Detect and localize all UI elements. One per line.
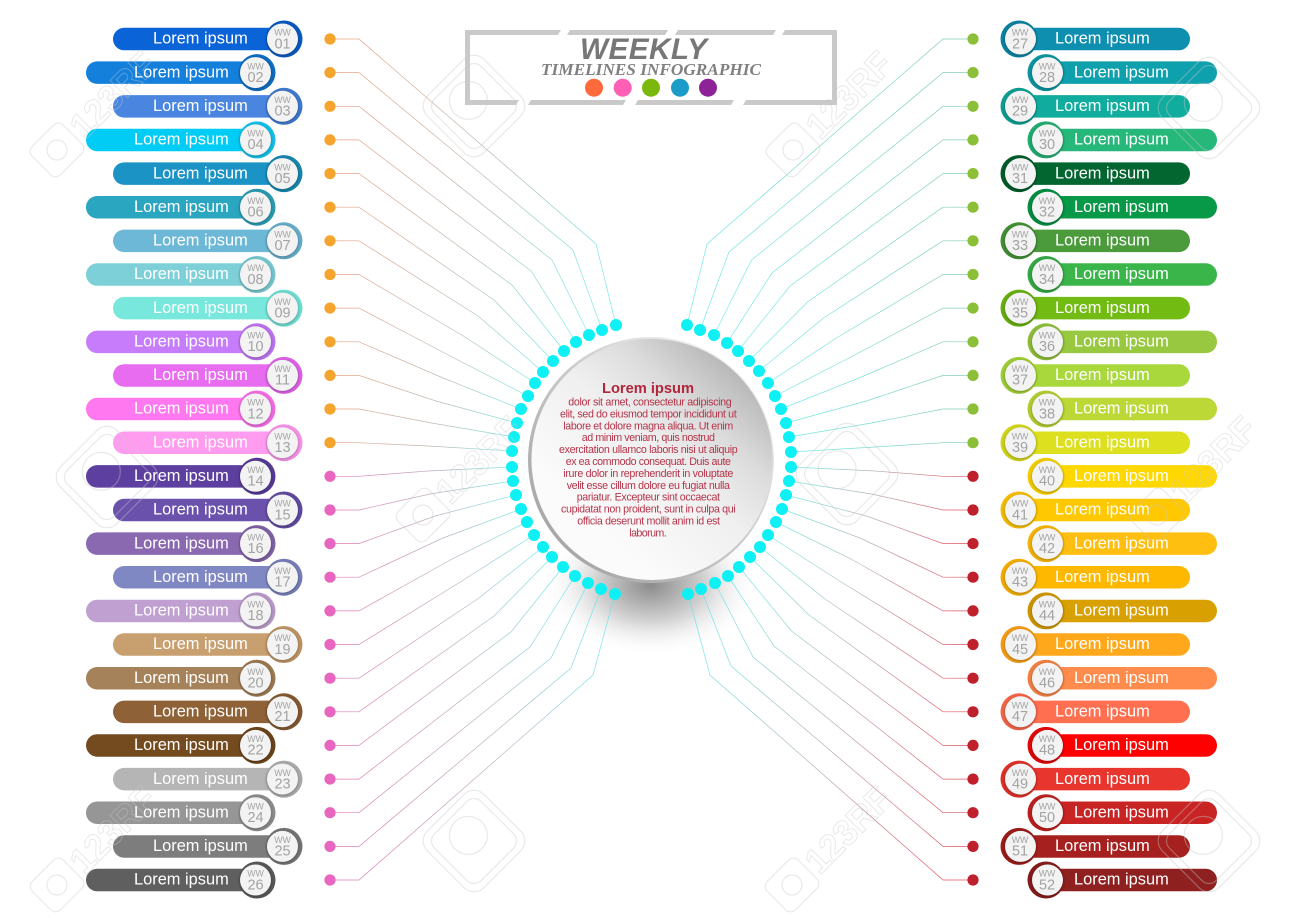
pill: week 15 — [113, 492, 302, 528]
pill: week 36 — [1028, 323, 1217, 360]
pill: week 31: 31 — [1012, 171, 1028, 187]
pill: week 08 — [86, 256, 276, 293]
pill: week 18: WW — [247, 600, 264, 610]
pill: week 17 — [113, 559, 302, 596]
pill: week 38: Lorem ipsum — [1074, 400, 1169, 418]
pill: week 49: Lorem ipsum — [1055, 770, 1150, 788]
orange node dots — [324, 33, 336, 448]
pill: week 12: WW — [247, 398, 264, 408]
pill: week 45: Lorem ipsum — [1055, 635, 1150, 653]
pill: week 05 — [113, 155, 302, 192]
pill: week 01: Lorem ipsum — [153, 30, 248, 48]
pill: week 34: Lorem ipsum — [1074, 265, 1169, 283]
pill: week 17: WW — [274, 566, 291, 576]
pill: week 37: 37 — [1012, 373, 1028, 389]
pill: week 44: 44 — [1039, 608, 1055, 624]
pill: week 49: WW — [1012, 768, 1029, 778]
center body text: elit, sed do eiusmod tempor incididunt ut — [560, 408, 737, 420]
pill: week 52: WW — [1039, 869, 1056, 879]
pill: week 18 — [86, 592, 276, 629]
connector lines: weeks 1-13 — [330, 39, 616, 451]
pill: week 28: WW — [1039, 61, 1056, 71]
red node dots — [967, 471, 979, 886]
pill: week 14: WW — [247, 465, 264, 475]
title frame — [465, 30, 837, 105]
pill: week 39 — [1000, 424, 1190, 461]
center body text: labore et dolore magna aliqua. Ut enim — [563, 420, 733, 432]
pill: week 21: Lorem ipsum — [153, 702, 248, 720]
pill: week 35: WW — [1012, 297, 1029, 307]
center body text: officia deserunt mollit anim id est — [577, 516, 720, 528]
pill: week 24: Lorem ipsum — [134, 803, 229, 821]
pill: week 48: 48 — [1039, 743, 1055, 759]
pill: week 16: Lorem ipsum — [134, 534, 229, 552]
green node dots — [967, 33, 979, 448]
pill: week 52 — [1028, 862, 1217, 898]
pill: week 50 — [1028, 794, 1217, 831]
pill: week 12: 12 — [247, 406, 264, 422]
watermark: top row — [27, 43, 1266, 180]
subtitle: timelines infographic: TIMELINES INFOGRAPHIC — [541, 60, 762, 79]
pill: week 24: 24 — [247, 810, 264, 826]
title colour dots — [585, 79, 717, 97]
pill: week 05: Lorem ipsum — [153, 164, 248, 182]
pill: week 36: 36 — [1039, 339, 1055, 355]
pill: week 27: WW — [1012, 28, 1029, 38]
pill: week 07: 07 — [274, 238, 291, 254]
pill: week 18: 18 — [247, 608, 264, 624]
pill: week 32: WW — [1039, 196, 1056, 206]
pill: week 31: WW — [1012, 162, 1029, 172]
pill: week 15: Lorem ipsum — [153, 501, 248, 519]
pill: week 38: 38 — [1039, 406, 1055, 422]
pill: week 31 — [1000, 155, 1190, 192]
connector lines: weeks 27-39 — [687, 39, 973, 452]
pill: week 42 — [1028, 525, 1217, 562]
pill: week 51: 51 — [1012, 844, 1028, 860]
pill: week 45: 45 — [1012, 642, 1028, 658]
pill: week 38: WW — [1039, 398, 1056, 408]
pill: week 47: 47 — [1012, 709, 1028, 725]
pill: week 04 — [86, 121, 276, 158]
center heading: Lorem ipsum — [602, 381, 694, 397]
pill: week 32 — [1028, 189, 1217, 226]
pill: week 29 — [1000, 88, 1190, 125]
pill: week 24 — [86, 794, 276, 831]
pill: week 44: Lorem ipsum — [1074, 602, 1169, 620]
pill: week 26 — [86, 862, 276, 898]
pill: week 29: WW — [1012, 95, 1029, 105]
pill: week 07 — [113, 222, 302, 259]
pill: week 19: 19 — [274, 642, 291, 658]
pill: week 01: 01 — [274, 36, 291, 52]
pill: week 11 — [113, 357, 302, 394]
pill: week 12: Lorem ipsum — [134, 400, 229, 418]
pill: week 51: Lorem ipsum — [1055, 837, 1150, 855]
center body text: irure dolor in reprehenderit in voluptate — [563, 468, 733, 480]
pill: week 02: WW — [247, 61, 264, 71]
pill: week 45: WW — [1012, 633, 1029, 643]
pill: week 13: WW — [274, 431, 291, 441]
pill: week 02 — [86, 54, 276, 91]
pill: week 46: WW — [1039, 667, 1056, 677]
pill: week 11: WW — [274, 364, 291, 374]
pill: week 35: Lorem ipsum — [1055, 299, 1150, 317]
pill: week 11: Lorem ipsum — [153, 366, 248, 384]
pill: week 48 — [1028, 727, 1217, 764]
pill: week 10: 10 — [247, 339, 264, 355]
pill: week 40: 40 — [1039, 474, 1055, 490]
center circle drop shadow — [541, 513, 761, 657]
pill: week 27: 27 — [1012, 36, 1028, 52]
pill: week 31: Lorem ipsum — [1055, 164, 1150, 182]
pill: week 51 — [1000, 828, 1190, 865]
pill: week 37: Lorem ipsum — [1055, 366, 1150, 384]
pill: week 07: WW — [274, 230, 291, 240]
pill: week 51: WW — [1012, 835, 1029, 845]
pill: week 14 — [86, 458, 276, 495]
pill: week 18: Lorem ipsum — [134, 602, 229, 620]
center body text: ad minim veniam, quis nostrud — [582, 432, 715, 444]
pill: week 09: Lorem ipsum — [153, 299, 248, 317]
pill: week 03: 03 — [274, 104, 291, 120]
pill: week 19: Lorem ipsum — [153, 635, 248, 653]
pill: week 14: Lorem ipsum — [134, 467, 229, 485]
pill: week 40 — [1028, 458, 1217, 495]
pill: week 01: WW — [274, 28, 291, 38]
pill: week 10: WW — [247, 330, 264, 340]
pill: week 30: Lorem ipsum — [1074, 131, 1169, 149]
pill: week 03: Lorem ipsum — [153, 97, 248, 115]
pill: week 44 — [1028, 592, 1217, 629]
pill: week 21: WW — [274, 700, 291, 710]
pill: week 24: WW — [247, 801, 264, 811]
pill: week 08: 08 — [247, 272, 264, 288]
center body text: laborum. — [629, 527, 667, 539]
pill: week 40: Lorem ipsum — [1074, 467, 1169, 485]
pill: week 07: Lorem ipsum — [153, 232, 248, 250]
center body text — [559, 396, 738, 539]
watermark: middle row: 123RF — [427, 408, 530, 511]
pill: week 19: WW — [274, 633, 291, 643]
pill: week 02: Lorem ipsum — [134, 63, 229, 81]
pink node dots — [324, 471, 336, 886]
pill: week 33: 33 — [1012, 238, 1028, 254]
center body text: exercitation ullamco laboris nisi ut aliquip — [559, 444, 738, 456]
pill: week 05: 05 — [274, 171, 291, 187]
pill: week 52: Lorem ipsum — [1074, 871, 1169, 889]
pill: week 20: Lorem ipsum — [134, 669, 229, 687]
pill: week 03: WW — [274, 95, 291, 105]
pill: week 20: WW — [247, 667, 264, 677]
pill: week 34: WW — [1039, 263, 1056, 273]
pill: week 10: Lorem ipsum — [134, 332, 229, 350]
pill: week 47: Lorem ipsum — [1055, 702, 1150, 720]
pill: week 39: 39 — [1012, 440, 1028, 456]
pill: week 43: WW — [1012, 566, 1029, 576]
pill: week 25: WW — [274, 835, 291, 845]
pill: week 28: 28 — [1039, 70, 1055, 86]
title: weekly: WEEKLY — [580, 33, 710, 66]
pill: week 23: WW — [274, 768, 291, 778]
pill: week 02: 02 — [247, 70, 264, 86]
pill: week 30: 30 — [1039, 137, 1055, 153]
pill: week 23: Lorem ipsum — [153, 770, 248, 788]
pill: week 16: 16 — [247, 541, 264, 557]
center body text: pariatur. Excepteur sint occaecat — [577, 492, 720, 504]
pill: week 42: 42 — [1039, 541, 1055, 557]
pill: week 17: 17 — [274, 575, 291, 591]
pill: week 43: Lorem ipsum — [1055, 568, 1150, 586]
pill: week 22: Lorem ipsum — [134, 736, 229, 754]
center body text: cupidatat non proident, sunt in culpa qui — [561, 504, 736, 516]
cyan dot ring around center — [506, 319, 797, 600]
pill: week 11: 11 — [275, 373, 290, 389]
pill: week 32: 32 — [1039, 204, 1055, 220]
pill: week 47: WW — [1012, 700, 1029, 710]
pill: week 46: Lorem ipsum — [1074, 669, 1169, 687]
pill: week 06: Lorem ipsum — [134, 198, 229, 216]
pill: week 27: Lorem ipsum — [1055, 30, 1150, 48]
pill: week 46 — [1028, 660, 1217, 697]
pill: week 41: Lorem ipsum — [1055, 501, 1150, 519]
pill: week 47 — [1000, 693, 1190, 730]
watermark: top row: 123RF — [61, 43, 164, 146]
pill: week 37: WW — [1012, 364, 1029, 374]
pill: week 48: Lorem ipsum — [1074, 736, 1169, 754]
pill: week 25: 25 — [274, 844, 291, 860]
pill: week 04: 04 — [247, 137, 264, 153]
pill: week 38 — [1028, 390, 1217, 428]
pill: week 44: WW — [1039, 600, 1056, 610]
pill: week 37 — [1000, 357, 1190, 394]
pill: week 40: WW — [1039, 465, 1056, 475]
pill: week 01 — [113, 20, 302, 58]
pill: week 23 — [113, 761, 302, 798]
pill: week 17: Lorem ipsum — [153, 568, 248, 586]
pill: week 50: WW — [1039, 801, 1056, 811]
watermark: middle row — [50, 408, 1264, 545]
watermark: bottom row — [27, 778, 1266, 915]
pill: week 32: Lorem ipsum — [1074, 198, 1169, 216]
pill: week 05: WW — [274, 162, 291, 172]
pill: week 21 — [113, 693, 302, 730]
pill: week 43: 43 — [1012, 575, 1028, 591]
connector lines: weeks 14-26 — [330, 467, 615, 880]
pill: week 46: 46 — [1039, 676, 1055, 692]
pill: week 04: Lorem ipsum — [134, 131, 229, 149]
center body text: ex ea commodo consequat. Duis aute — [566, 456, 731, 468]
pill: week 22 — [86, 727, 276, 764]
pill: week 09 — [113, 290, 302, 327]
pill: week 10 — [86, 323, 276, 360]
pill: week 12 — [86, 390, 276, 428]
pill: week 28: Lorem ipsum — [1074, 63, 1169, 81]
pill: week 25 — [113, 828, 302, 865]
pill: week 08: Lorem ipsum — [134, 265, 229, 283]
pill: week 06 — [86, 189, 276, 226]
pill: week 22: WW — [247, 734, 264, 744]
pill: week 43 — [1000, 559, 1190, 596]
pill: week 22: 22 — [247, 743, 264, 759]
pill: week 26: Lorem ipsum — [134, 871, 229, 889]
watermark: middle row: 123RF — [1161, 408, 1264, 511]
pill: week 45 — [1000, 626, 1190, 663]
pill: week 13: 13 — [274, 440, 291, 456]
pill: week 42: Lorem ipsum — [1074, 534, 1169, 552]
pill: week 08: WW — [247, 263, 264, 273]
pill: week 03 — [113, 88, 302, 125]
watermark: top row: 123RF — [797, 43, 900, 146]
pill: week 35: 35 — [1012, 305, 1028, 321]
pill: week 49 — [1000, 761, 1190, 798]
center body text: velit esse cillum dolore eu fugiat nulla — [567, 480, 730, 492]
center body text: dolor sit amet, consectetur adipiscing — [568, 396, 732, 408]
pill: week 04: WW — [247, 129, 264, 139]
pill: week 36: WW — [1039, 330, 1056, 340]
pill: week 41 — [1000, 492, 1190, 528]
pill: week 49: 49 — [1012, 776, 1028, 792]
pill: week 20 — [86, 660, 276, 697]
pill: week 34 — [1028, 256, 1217, 293]
pill: week 30: WW — [1039, 129, 1056, 139]
pill: week 50: 50 — [1039, 810, 1055, 826]
pill: week 14: 14 — [247, 474, 264, 490]
pill: week 41: 41 — [1012, 507, 1028, 523]
pill: week 21: 21 — [274, 709, 291, 725]
pill: week 20: 20 — [247, 676, 264, 692]
pill: week 25: Lorem ipsum — [153, 837, 248, 855]
center circle panel — [528, 337, 774, 583]
pill: week 13: Lorem ipsum — [153, 433, 248, 451]
pill: week 39: WW — [1012, 431, 1029, 441]
pill: week 15: 15 — [274, 507, 291, 523]
pill: week 15: WW — [274, 499, 291, 509]
pill: week 35 — [1000, 290, 1190, 327]
pill: week 33 — [1000, 222, 1190, 259]
pill: week 16: WW — [247, 532, 264, 542]
pill: week 48: WW — [1039, 734, 1056, 744]
pill: week 26: 26 — [247, 877, 264, 893]
pill: week 09: WW — [274, 297, 291, 307]
pill: week 29: Lorem ipsum — [1055, 97, 1150, 115]
pill: week 16 — [86, 525, 276, 562]
connector lines: weeks 40-52 — [688, 467, 973, 880]
pill: week 06: WW — [247, 196, 264, 206]
pill: week 23: 23 — [274, 776, 291, 792]
watermark: bottom row: 123RF — [61, 778, 164, 881]
pill: week 13 — [113, 424, 302, 461]
pill: week 28 — [1028, 54, 1217, 91]
pill: week 26: WW — [247, 869, 264, 879]
watermark: bottom row: 123RF — [796, 778, 899, 881]
pill: week 33: WW — [1012, 230, 1029, 240]
pill: week 39: Lorem ipsum — [1055, 433, 1150, 451]
pill: week 09: 09 — [274, 305, 291, 321]
pill: week 19 — [113, 626, 302, 663]
pill: week 50: Lorem ipsum — [1074, 803, 1169, 821]
pill: week 29: 29 — [1012, 104, 1028, 120]
pill: week 27 — [1000, 20, 1190, 58]
pill: week 34: 34 — [1039, 272, 1055, 288]
pill: week 41: WW — [1012, 499, 1029, 509]
pill: week 52: 52 — [1039, 877, 1055, 893]
pill: week 33: Lorem ipsum — [1055, 232, 1150, 250]
pill: week 30 — [1028, 121, 1217, 158]
pill: week 42: WW — [1039, 532, 1056, 542]
pill: week 06: 06 — [247, 204, 264, 220]
pill: week 36: Lorem ipsum — [1074, 332, 1169, 350]
